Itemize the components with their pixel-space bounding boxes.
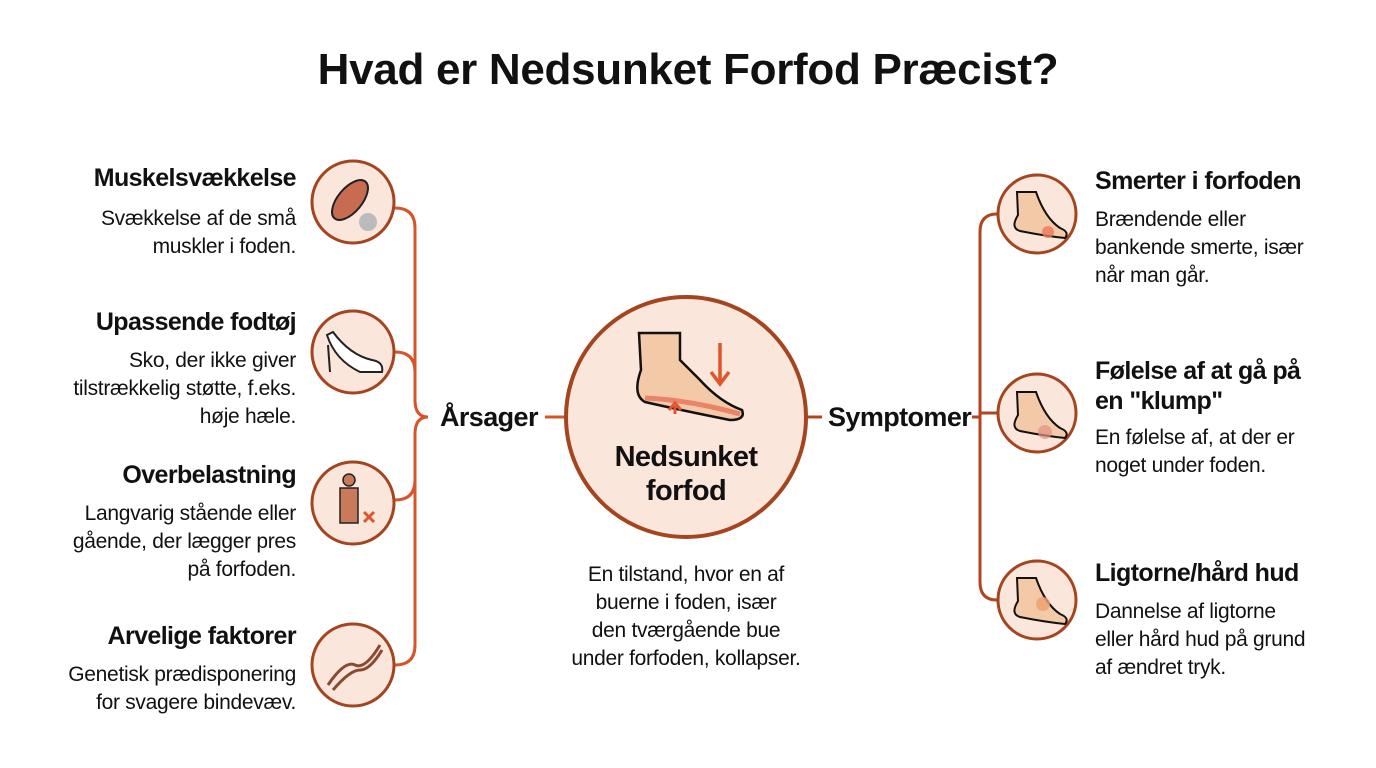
cause: Overbelastning: gående, der lægger pres xyxy=(73,530,296,553)
symptom: klump: noget under foden. xyxy=(1095,454,1266,477)
cause: Overbelastning: Langvarig stående eller xyxy=(85,502,296,525)
cause: Upassende fodtøj: høje hæle. xyxy=(200,405,296,428)
cause: Upassende fodtøj: Upassende fodtøj xyxy=(96,308,296,336)
cause icons xyxy=(312,161,394,706)
cause: Arvelige faktorer: Genetisk prædisponering xyxy=(68,663,296,686)
connector: symptoms line xyxy=(806,214,997,600)
title: Hvad er Nedsunket Forfod Præcist? xyxy=(318,45,1058,94)
symptom: Ligtorne xyxy=(1095,559,1305,679)
center label: Nedsunket xyxy=(615,441,757,473)
symptom: Ligtorne: eller hård hud på grund xyxy=(1095,628,1305,651)
cause: Muskelsvækkelse: Svækkelse af de små xyxy=(101,207,296,230)
symptom: klump: Følelse af at gå på xyxy=(1095,357,1300,385)
symptom: klump: en "klump" xyxy=(1095,387,1222,415)
cause: Upassende fodtøj: Sko, der ikke giver xyxy=(129,349,296,372)
symptom: klump xyxy=(1095,357,1301,477)
cause: Arvelige faktorer: Arvelige faktorer xyxy=(108,622,296,650)
cause: Overbelastning: på forfoden. xyxy=(188,558,296,581)
center circle xyxy=(566,297,806,537)
symptom: Ligtorne: af ændret tryk. xyxy=(1095,656,1226,679)
symptom: Smerter xyxy=(1095,167,1304,287)
definition text: under forfoden, kollapser. xyxy=(571,647,801,670)
definition text xyxy=(571,563,801,670)
symptom: klump: En følelse af, at der er xyxy=(1095,426,1294,449)
symptom: Smerter: Brændende eller xyxy=(1095,208,1246,231)
cause: Muskelsvækkelse: Muskelsvækkelse xyxy=(94,164,296,192)
cause: Arvelige faktorer xyxy=(68,622,296,714)
center label: forfod xyxy=(646,475,726,507)
label: symptoms: Symptomer xyxy=(828,402,971,432)
cause: Upassende fodtøj: tilstrækkelig støtte, f.eks. xyxy=(73,377,296,400)
symptom icons xyxy=(998,175,1076,639)
cause: Overbelastning: Overbelastning xyxy=(122,461,296,489)
symptom: Ligtorne: Ligtorne/hård hud xyxy=(1095,559,1299,587)
definition text: den tværgående bue xyxy=(592,619,780,642)
label: causes: Årsager xyxy=(440,402,538,432)
cause: Overbelastning xyxy=(73,461,296,581)
cause: Arvelige faktorer: for svagere bindevæv. xyxy=(96,691,296,714)
definition text: En tilstand, hvor en af xyxy=(588,563,784,586)
cause: Muskelsvækkelse: muskler i foden. xyxy=(153,235,296,258)
symptom: Ligtorne: Dannelse af ligtorne xyxy=(1095,600,1276,623)
definition text: buerne i foden, især xyxy=(596,591,776,614)
symptom: Smerter: bankende smerte, især xyxy=(1095,236,1303,259)
center label xyxy=(615,441,758,507)
cause: Muskelsvækkelse xyxy=(94,164,296,258)
symptom: Smerter: Smerter i forfoden xyxy=(1095,167,1301,195)
connector: causes bracket xyxy=(395,208,566,665)
symptom: Smerter: når man går. xyxy=(1095,264,1209,287)
cause: Upassende fodtøj xyxy=(73,308,296,428)
